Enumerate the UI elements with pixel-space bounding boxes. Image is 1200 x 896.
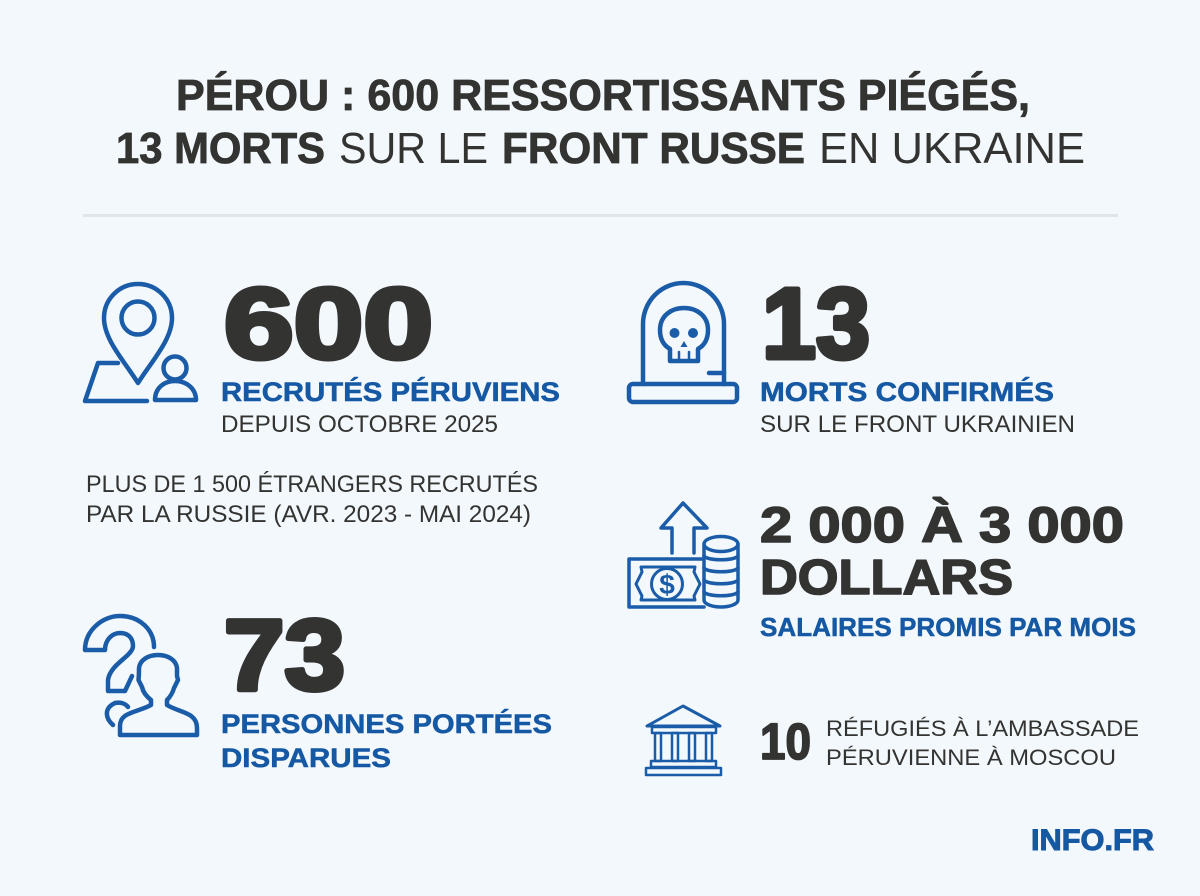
icon: question mark and person (85, 616, 197, 735)
icon: tombstone with skull (629, 283, 737, 402)
stat: 13 dead: MORTS CONFIRMÉS (760, 377, 1054, 407)
stat: 600 recruits: 600 (224, 268, 433, 380)
stat: 73 missing: DISPARUES (221, 743, 391, 773)
stat: 13 dead (760, 268, 1075, 438)
icon: map pin and person (85, 284, 196, 401)
title: 13 MORTS (116, 124, 325, 173)
stat: 600 recruits: DEPUIS OCTOBRE 2025 (221, 411, 498, 438)
title: PÉROU : 600 RESSORTISSANTS PIÉGÉS, (176, 70, 1030, 120)
text block: foreign recruits: PAR LA RUSSIE (AVR. 2023 - MAI 2024) (86, 501, 531, 528)
stat: 600 recruits (221, 268, 560, 438)
stat: 10 refugees: RÉFUGIÉS À L’AMBASSADE (826, 716, 1139, 741)
stat: 10 refugees (760, 713, 1139, 770)
stat: salaries: DOLLARS (760, 551, 1013, 605)
stat: salaries (760, 497, 1136, 642)
stat: 13 dead: SUR LE FRONT UKRAINIEN (760, 411, 1075, 438)
stat: 13 dead: 13 (762, 268, 870, 380)
title (116, 70, 1085, 173)
stat: 73 missing: PERSONNES PORTÉES (221, 709, 552, 739)
stat: salaries: 2 000 À 3 000 (760, 497, 1124, 553)
stat: 10 refugees: 10 (760, 713, 811, 770)
icon: embassy building (646, 706, 721, 775)
stat: 600 recruits: RECRUTÉS PÉRUVIENS (221, 377, 560, 407)
stat: salaries: SALAIRES PROMIS PAR MOIS (760, 612, 1136, 642)
title: SUR LE (339, 124, 488, 173)
icon: money and up arrow (629, 503, 738, 607)
title: EN UKRAINE (819, 124, 1085, 173)
stat: 10 refugees: PÉRUVIENNE À MOSCOU (826, 745, 1116, 770)
text block: foreign recruits (86, 471, 538, 528)
source logo: INFO.FR (1031, 824, 1154, 857)
icon: money and up arrow: $ (659, 569, 675, 600)
text block: foreign recruits: PLUS DE 1 500 ÉTRANGERS RECRUTÉS (86, 471, 538, 498)
stat: 73 missing: 73 (224, 600, 345, 712)
title: FRONT RUSSE (502, 124, 805, 173)
stat: 73 missing (221, 600, 552, 773)
